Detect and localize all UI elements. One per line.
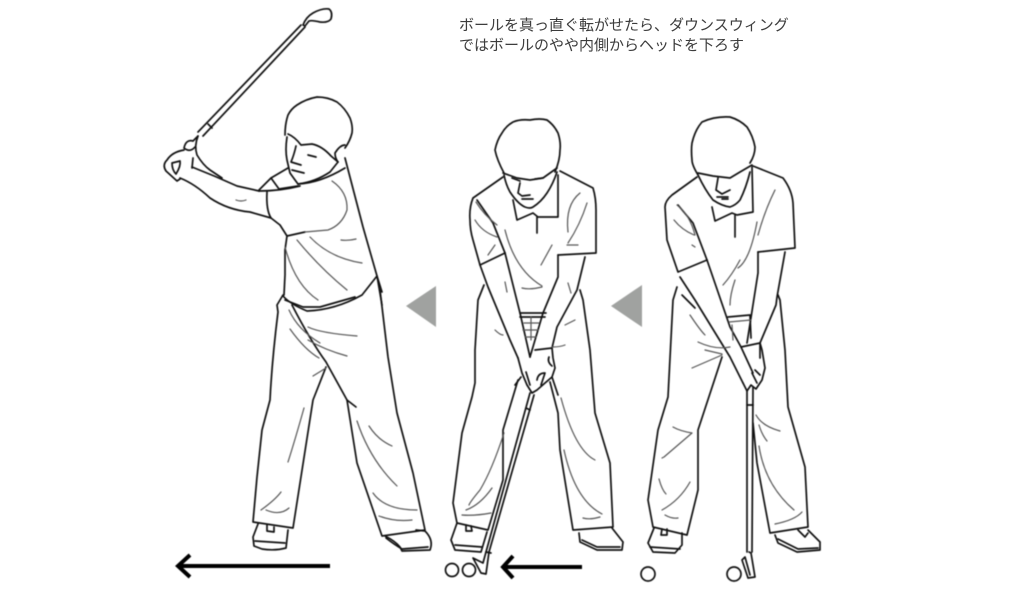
club [473,393,534,574]
trouser folds [462,398,602,519]
trouser folds [659,355,802,524]
figure: address square to ball [641,117,820,581]
collar [259,168,345,190]
arrow: direction triangle left [406,286,436,327]
golf balls [446,564,476,576]
shirt collar [513,175,558,233]
arrow: direction triangle right [611,285,642,327]
shoes [451,523,623,552]
club raised at top of swing [198,9,332,136]
arrow: swing direction left [178,555,330,577]
hands on grip [741,343,765,391]
arrow: head path left [503,556,582,578]
caption text: ではボールのやや内側からヘッドを下ろす [459,37,744,54]
figure: address with club forward [446,119,623,576]
belt and fly [520,313,546,317]
arms [680,252,785,383]
torso and belt [283,158,382,311]
shirt collar [712,167,753,237]
shoes [648,528,820,553]
trousers [253,290,425,536]
shoes [253,524,431,551]
hands on grip [164,136,222,181]
belt and waist [682,295,751,338]
head with hair [692,117,755,207]
fold on forearm [236,200,246,201]
arms [480,253,585,358]
trousers [453,285,613,530]
folds [674,190,775,354]
folds [475,193,587,347]
shirt [665,166,795,272]
trousers [648,287,808,535]
trouser folds [261,310,417,520]
shirt folds [285,181,362,300]
shirt [470,171,596,265]
leading arm and sleeve [180,167,305,295]
golf balls [641,567,741,581]
figure: golfer at top of backswing [164,9,431,551]
caption text: ボールを真っ直ぐ転がせたら、ダウンスウィング [459,17,789,34]
caption text [459,17,789,54]
club [742,387,755,578]
hands on grip [515,348,558,395]
head with hair [285,97,352,184]
head with hair [495,119,560,208]
